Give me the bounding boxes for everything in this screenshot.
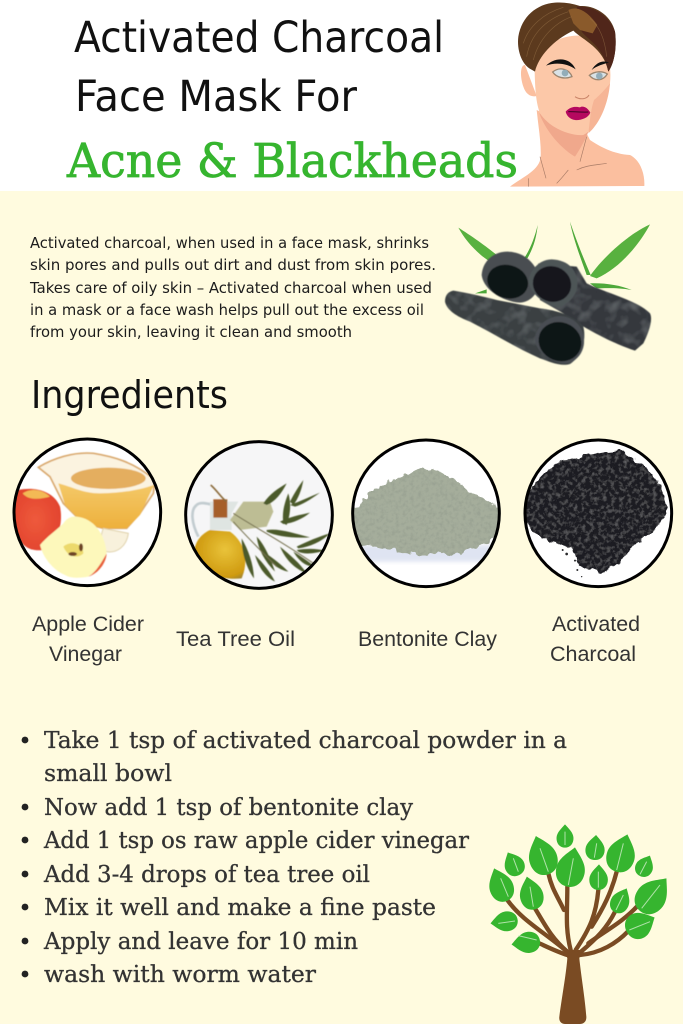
list: preparation steps: Apply and leave for 10 min bbox=[43, 927, 358, 955]
label: Activated Charcoal bbox=[550, 612, 640, 666]
text block: intro paragraph: skin pores and pulls out dirt and dust from skin pores. bbox=[30, 256, 436, 274]
ingredient image: tea tree oil bbox=[185, 442, 333, 590]
text block: intro paragraph: Activated charcoal, when used in a face mask, shrinks bbox=[30, 234, 429, 252]
label: Tea Tree Oil: Tea Tree Oil bbox=[176, 627, 295, 651]
text block: intro paragraph: from your skin, leaving it clean and smooth bbox=[30, 323, 352, 341]
list: preparation steps bbox=[22, 726, 567, 988]
label: Activated Charcoal: Activated bbox=[552, 612, 640, 636]
list: preparation steps: Now add 1 tsp of bentonite clay bbox=[44, 793, 414, 821]
title: Face Mask For bbox=[75, 72, 357, 122]
list: preparation steps: wash with worm water bbox=[44, 960, 317, 988]
title: Activated Charcoal bbox=[74, 13, 444, 63]
list: preparation steps: Add 1 tsp os raw apple cider vinegar bbox=[43, 826, 470, 854]
list: preparation steps: small bowl bbox=[44, 759, 172, 787]
label: Apple Cider Vinegar bbox=[32, 612, 144, 666]
illustration: woman's face bbox=[510, 2, 644, 187]
label: Activated Charcoal: Charcoal bbox=[550, 642, 636, 666]
panel: white header background bbox=[0, 0, 683, 191]
text block: intro paragraph: in a mask or a face wash helps pull out the excess oil bbox=[30, 301, 424, 319]
label: Apple Cider Vinegar: Vinegar bbox=[49, 642, 122, 666]
ingredient image: activated charcoal powder bbox=[523, 440, 673, 588]
heading: Ingredients: Ingredients bbox=[31, 373, 228, 417]
text block: intro paragraph bbox=[29, 234, 436, 341]
label: Bentonite Clay: Bentonite Clay bbox=[358, 627, 497, 651]
illustration: charcoal sticks with bamboo leaves bbox=[445, 222, 651, 367]
illustration: green tree bbox=[483, 824, 678, 1024]
title: Acne & Blackheads bbox=[66, 134, 518, 189]
list: preparation steps: Take 1 tsp of activated charcoal powder in a bbox=[44, 726, 567, 754]
text block: intro paragraph: Takes care of oily skin – Activated charcoal when used bbox=[29, 279, 432, 297]
list: preparation steps: Add 3-4 drops of tea tree oil bbox=[43, 860, 370, 888]
list: preparation steps: Mix it well and make a fine paste bbox=[44, 893, 436, 921]
label: Apple Cider Vinegar: Apple Cider bbox=[32, 612, 144, 636]
ingredient image: bentonite clay bbox=[350, 440, 503, 588]
ingredient image: apple cider vinegar bbox=[13, 438, 162, 587]
title bbox=[66, 13, 518, 189]
